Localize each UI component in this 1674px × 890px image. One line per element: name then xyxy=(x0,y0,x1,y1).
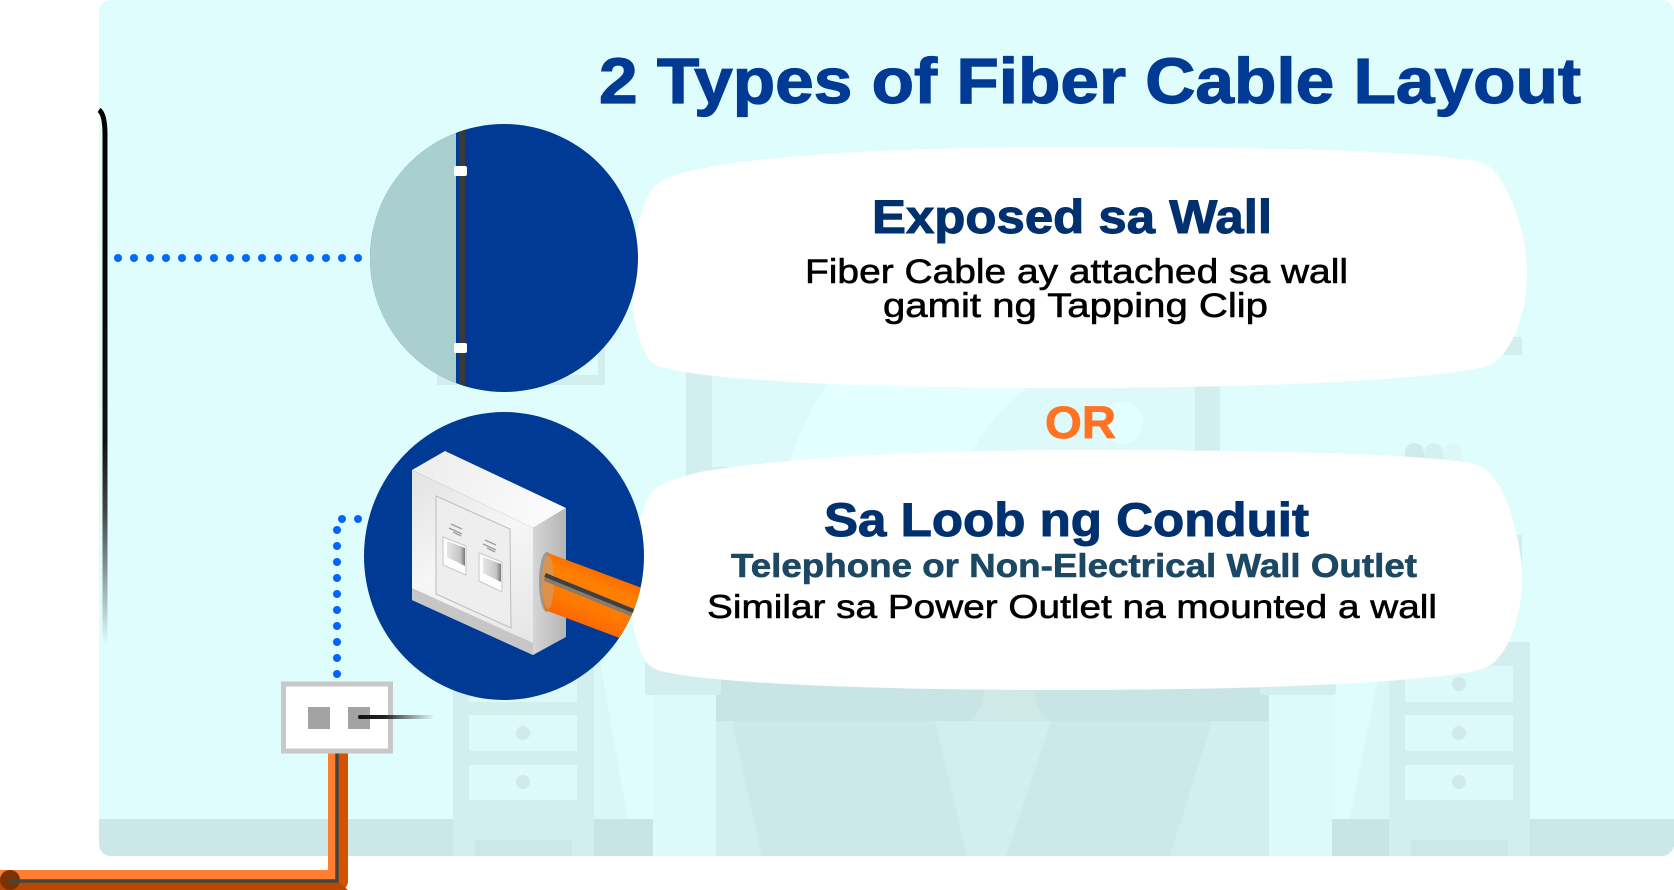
picture frame right xyxy=(1503,337,1522,355)
panel: sa loob ng conduit bubble xyxy=(630,450,1522,690)
or separator: OR xyxy=(1045,397,1116,448)
left drawer cabinet xyxy=(453,666,594,819)
subheading: wall outlet: Telephone or Non-Electrical Wall Outlet xyxy=(731,547,1417,584)
black wire fading down the wall xyxy=(99,110,105,645)
socket right xyxy=(348,707,370,729)
table legs xyxy=(645,660,1336,856)
title: 2 Types of Fiber Cable Layout xyxy=(599,45,1581,117)
description: exposed sa wall: Fiber Cable ay attached sa wall xyxy=(805,253,1348,291)
panel: exposed sa wall bubble xyxy=(632,147,1527,388)
tapping clip bottom xyxy=(454,343,467,353)
fiber cable xyxy=(459,124,465,392)
tapping clip top xyxy=(454,166,467,176)
books on shelf xyxy=(1405,443,1443,460)
light cones beside table xyxy=(594,660,634,856)
icon: wall outlet box xyxy=(412,451,566,655)
description: exposed sa wall: gamit ng Tapping Clip xyxy=(883,287,1268,325)
dotted connector to exposed circle xyxy=(114,254,362,262)
wall outlet box xyxy=(284,684,435,751)
icon: conduit with fiber cable xyxy=(539,552,640,638)
conduit end cap xyxy=(0,870,20,890)
heading: sa loob ng conduit: Sa Loob ng Conduit xyxy=(824,493,1309,546)
window frame xyxy=(686,372,1220,476)
wall shelf hint right xyxy=(1517,535,1522,562)
description: sa loob ng conduit: Similar sa Power Outlet na mounted a wall xyxy=(707,588,1437,625)
fiber cable inside conduit xyxy=(10,750,337,881)
circle: exposed cable with tapping clips xyxy=(370,124,638,392)
picture frame left xyxy=(437,346,605,385)
table body xyxy=(716,680,1269,819)
description: exposed sa wall xyxy=(805,253,1348,325)
circle: wall outlet with conduit xyxy=(364,412,650,700)
dotted connector to outlet circle xyxy=(333,515,362,678)
socket left xyxy=(308,707,330,729)
floor xyxy=(99,819,1674,856)
orange conduit pipe xyxy=(0,750,348,890)
heading: exposed sa wall: Exposed sa Wall xyxy=(872,190,1272,243)
right drawer cabinet xyxy=(1389,642,1530,819)
cord from socket xyxy=(358,715,435,719)
